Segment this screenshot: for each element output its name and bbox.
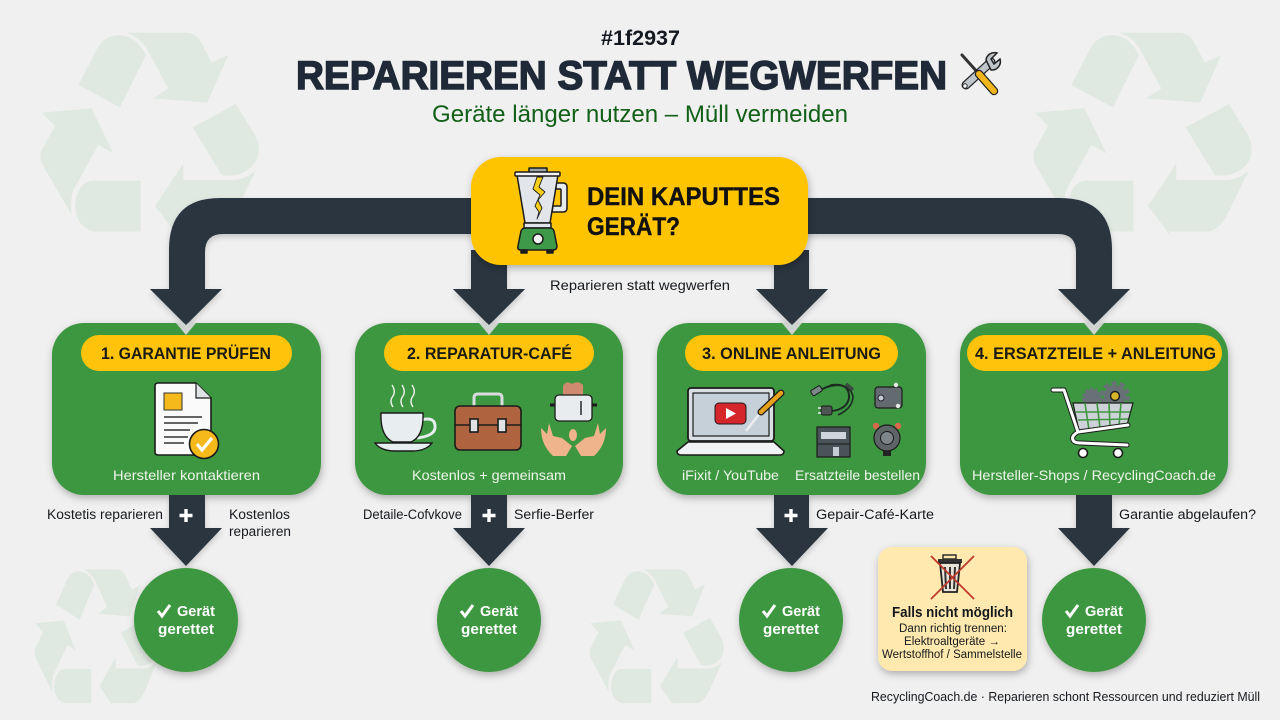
caption under top box: Reparieren statt wegwerfen — [550, 277, 730, 293]
icon: laptop with video — [677, 388, 784, 455]
icon: coffee cup — [375, 385, 435, 451]
result circle 4: gerettet — [1066, 622, 1122, 638]
pill heading — [967, 335, 1222, 371]
label: left of arrow 1: Kostetis reparieren — [47, 507, 163, 522]
card caption: Hersteller kontaktieren — [113, 467, 260, 483]
panel: 2 Reparatur-Café — [355, 289, 623, 495]
recycling watermark: bottom left — [35, 570, 158, 707]
label: right of arrow 1: Kostenlos — [229, 507, 290, 522]
pill heading: 4. ERSATZTEILE + ANLEITUNG — [975, 344, 1216, 363]
footer: RecyclingCoach.de · Reparieren schont Ressourcen und reduziert Müll — [871, 689, 1260, 704]
flow connectors from top box — [150, 198, 1130, 325]
plus sign: arrow 2 — [482, 509, 496, 522]
icon: wrench and screwdriver — [962, 53, 1000, 91]
recycling watermark: top right — [1033, 33, 1252, 237]
card caption: Hersteller-Shops / RecyclingCoach.de — [972, 467, 1216, 483]
arrow: card 4 to result — [1058, 495, 1130, 566]
panel: 4 Ersatzteile + Anleitung — [960, 289, 1228, 495]
callout: disposal note — [878, 547, 1027, 671]
pill heading — [81, 335, 292, 371]
tag text: #1f2937 — [601, 27, 680, 50]
box heading — [587, 183, 780, 241]
recycling watermark: bottom middle — [590, 570, 724, 707]
label: right of arrow 2: Serfie-Berfer — [514, 507, 595, 522]
pill heading: 1. GARANTIE PRÜFEN — [101, 344, 271, 363]
result circle 4: Gerät — [1085, 604, 1123, 620]
note body: Wertstoffhof / Sammelstelle — [882, 649, 1022, 661]
result circle 3 — [739, 568, 843, 672]
box heading: GERÄT? — [587, 213, 680, 241]
icon: document with check — [155, 383, 218, 458]
note heading: Falls nicht möglich — [892, 605, 1013, 621]
title: REPARIEREN STATT WEGWERFEN — [296, 54, 947, 98]
plus sign: arrow 1 — [180, 509, 192, 522]
card caption: left: iFixit / YouTube — [682, 467, 779, 483]
pill heading — [384, 335, 594, 371]
arrow: card 2 to result — [453, 495, 525, 566]
icon: spare parts — [810, 383, 902, 457]
panel: 3 Online Anleitung — [657, 289, 926, 495]
label: right of arrow 3: Gepair-Café-Karte — [816, 507, 934, 522]
pill heading — [685, 335, 898, 371]
result circle 1: gerettet — [158, 622, 214, 638]
result circle 4 — [1042, 568, 1146, 672]
pill heading: 3. ONLINE ANLEITUNG — [702, 344, 881, 363]
result circle 2: Gerät — [480, 604, 518, 620]
arrow: card 3 to result — [756, 495, 828, 566]
pill heading: 2. REPARATUR-CAFÉ — [407, 344, 572, 363]
card caption: Kostenlos + gemeinsam — [412, 467, 566, 483]
icon: toaster in hands — [541, 382, 606, 456]
icon: shopping cart with gears — [1053, 383, 1133, 458]
label: left of arrow 2: Detaile-Cofvkove — [363, 507, 462, 522]
result circle 2 — [437, 568, 541, 672]
subtitle: Geräte länger nutzen – Müll vermeiden — [432, 101, 848, 128]
icon: crossed-out bin — [931, 555, 974, 599]
result circle 3: Gerät — [782, 604, 820, 620]
icon: broken blender — [515, 168, 567, 253]
recycling watermark: top left — [40, 33, 259, 237]
result circle 1: Gerät — [177, 604, 215, 620]
result circle 1 — [134, 568, 238, 672]
label: right of arrow 1: reparieren — [229, 524, 291, 539]
note body — [882, 623, 1022, 661]
box heading: DEIN KAPUTTES — [587, 183, 780, 211]
label: right of arrow 4: Garantie abgelaufen? — [1119, 507, 1256, 522]
plus sign: arrow 3 — [784, 509, 798, 522]
icon: toolbox — [455, 394, 521, 450]
panel: 1 Garantie prüfen — [52, 289, 321, 495]
note body: Dann richtig trennen: — [899, 623, 1007, 635]
result circle 2: gerettet — [461, 622, 517, 638]
start box: broken device — [471, 157, 808, 265]
card caption: right: Ersatzteile bestellen — [795, 467, 920, 483]
note body: Elektroaltgeräte → — [904, 636, 1000, 648]
label: right of arrow 1 — [229, 507, 291, 539]
arrow: card 1 to result — [150, 495, 222, 566]
result circle 3: gerettet — [763, 622, 819, 638]
